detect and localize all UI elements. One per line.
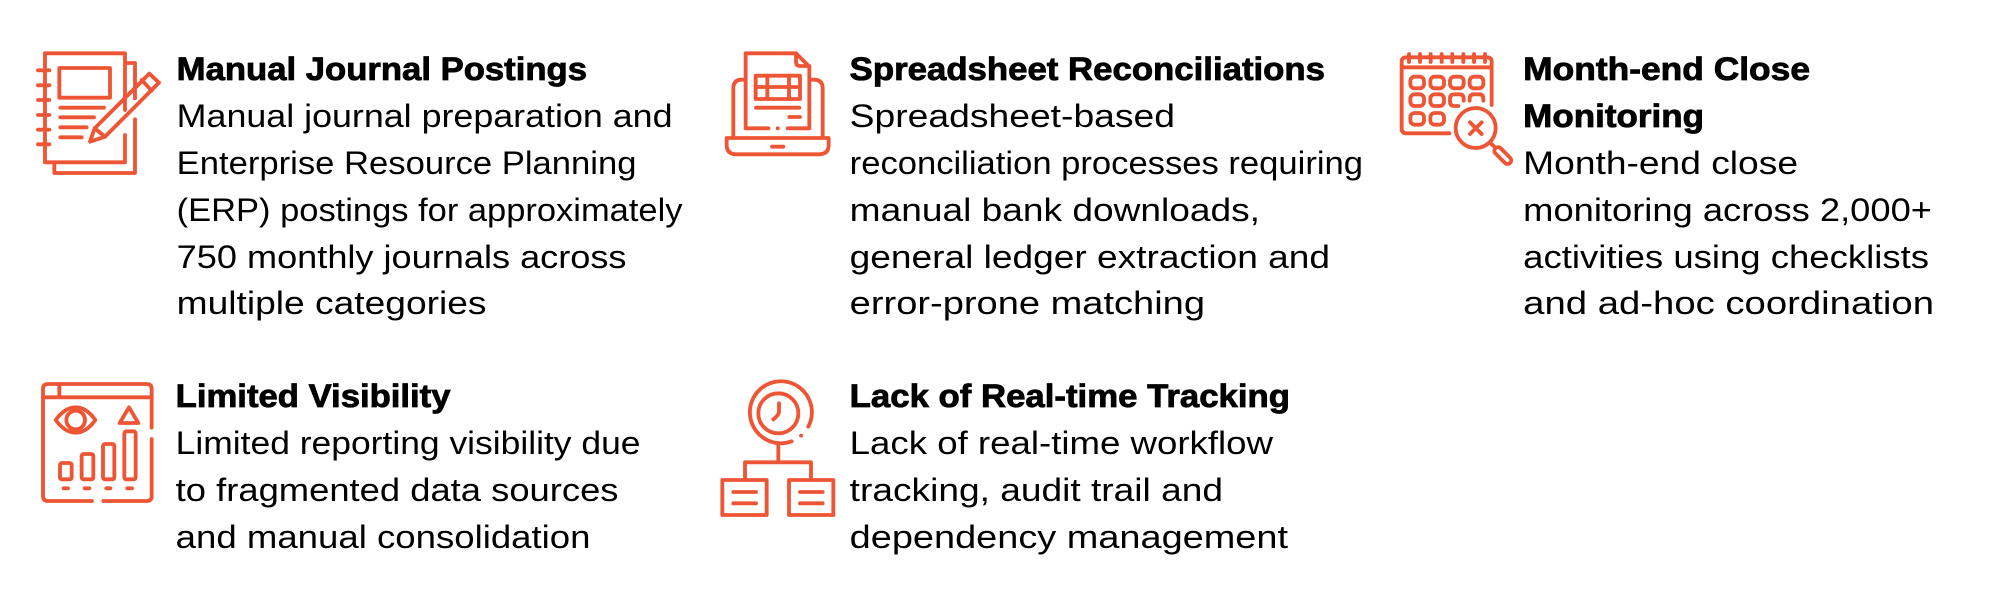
icon: dashboard with eye and bars — [43, 384, 152, 501]
body text: Enterprise Resource Planning — [177, 145, 636, 181]
body text: manual bank downloads, — [850, 192, 1260, 228]
body text — [177, 98, 682, 321]
body text: to fragmented data sources — [176, 472, 618, 508]
body text — [850, 425, 1288, 555]
icon: calendar with magnifier — [1402, 54, 1513, 165]
panel: Lack of Real-time Tracking — [722, 378, 1290, 555]
icon: clock with workflow boxes — [722, 381, 833, 515]
body text: Month-end close — [1523, 145, 1798, 181]
body text — [1523, 145, 1934, 321]
body text: reconciliation processes requiring — [850, 145, 1363, 181]
body text: (ERP) postings for approximately — [177, 192, 682, 228]
body text: 750 monthly journals across — [177, 239, 626, 275]
body text: Lack of real-time workflow — [850, 425, 1274, 461]
body text: Limited reporting visibility due — [176, 425, 640, 461]
body text: Manual journal preparation and — [177, 98, 672, 134]
body text: Spreadsheet-based — [850, 98, 1175, 134]
panel: Limited Visibility — [43, 378, 641, 555]
panel: Manual Journal Postings — [38, 51, 683, 321]
heading: Month-end Close — [1523, 51, 1810, 87]
body text: and ad-hoc coordination — [1523, 285, 1934, 321]
body text: activities using checklists — [1523, 239, 1929, 275]
icon: laptop with spreadsheet — [727, 53, 829, 154]
panel: Spreadsheet Reconciliations — [727, 51, 1363, 321]
body text: monitoring across 2,000+ — [1523, 192, 1932, 228]
body text: multiple categories — [177, 285, 486, 321]
body text: general ledger extraction and — [850, 239, 1330, 275]
heading: Lack of Real-time Tracking — [850, 378, 1290, 414]
heading: Monitoring — [1523, 98, 1704, 134]
body text: and manual consolidation — [176, 519, 590, 555]
heading — [1523, 51, 1810, 134]
heading: Spreadsheet Reconciliations — [850, 51, 1325, 87]
body text: tracking, audit trail and — [850, 472, 1223, 508]
heading: Limited Visibility — [176, 378, 451, 414]
body text — [850, 98, 1363, 321]
heading: Manual Journal Postings — [177, 51, 587, 87]
panel: Month-end Close Monitoring — [1402, 51, 1934, 321]
body text: error-prone matching — [850, 285, 1205, 321]
icon: notebook and pencil — [38, 53, 159, 173]
body text: dependency management — [850, 519, 1288, 555]
body text — [176, 425, 640, 555]
